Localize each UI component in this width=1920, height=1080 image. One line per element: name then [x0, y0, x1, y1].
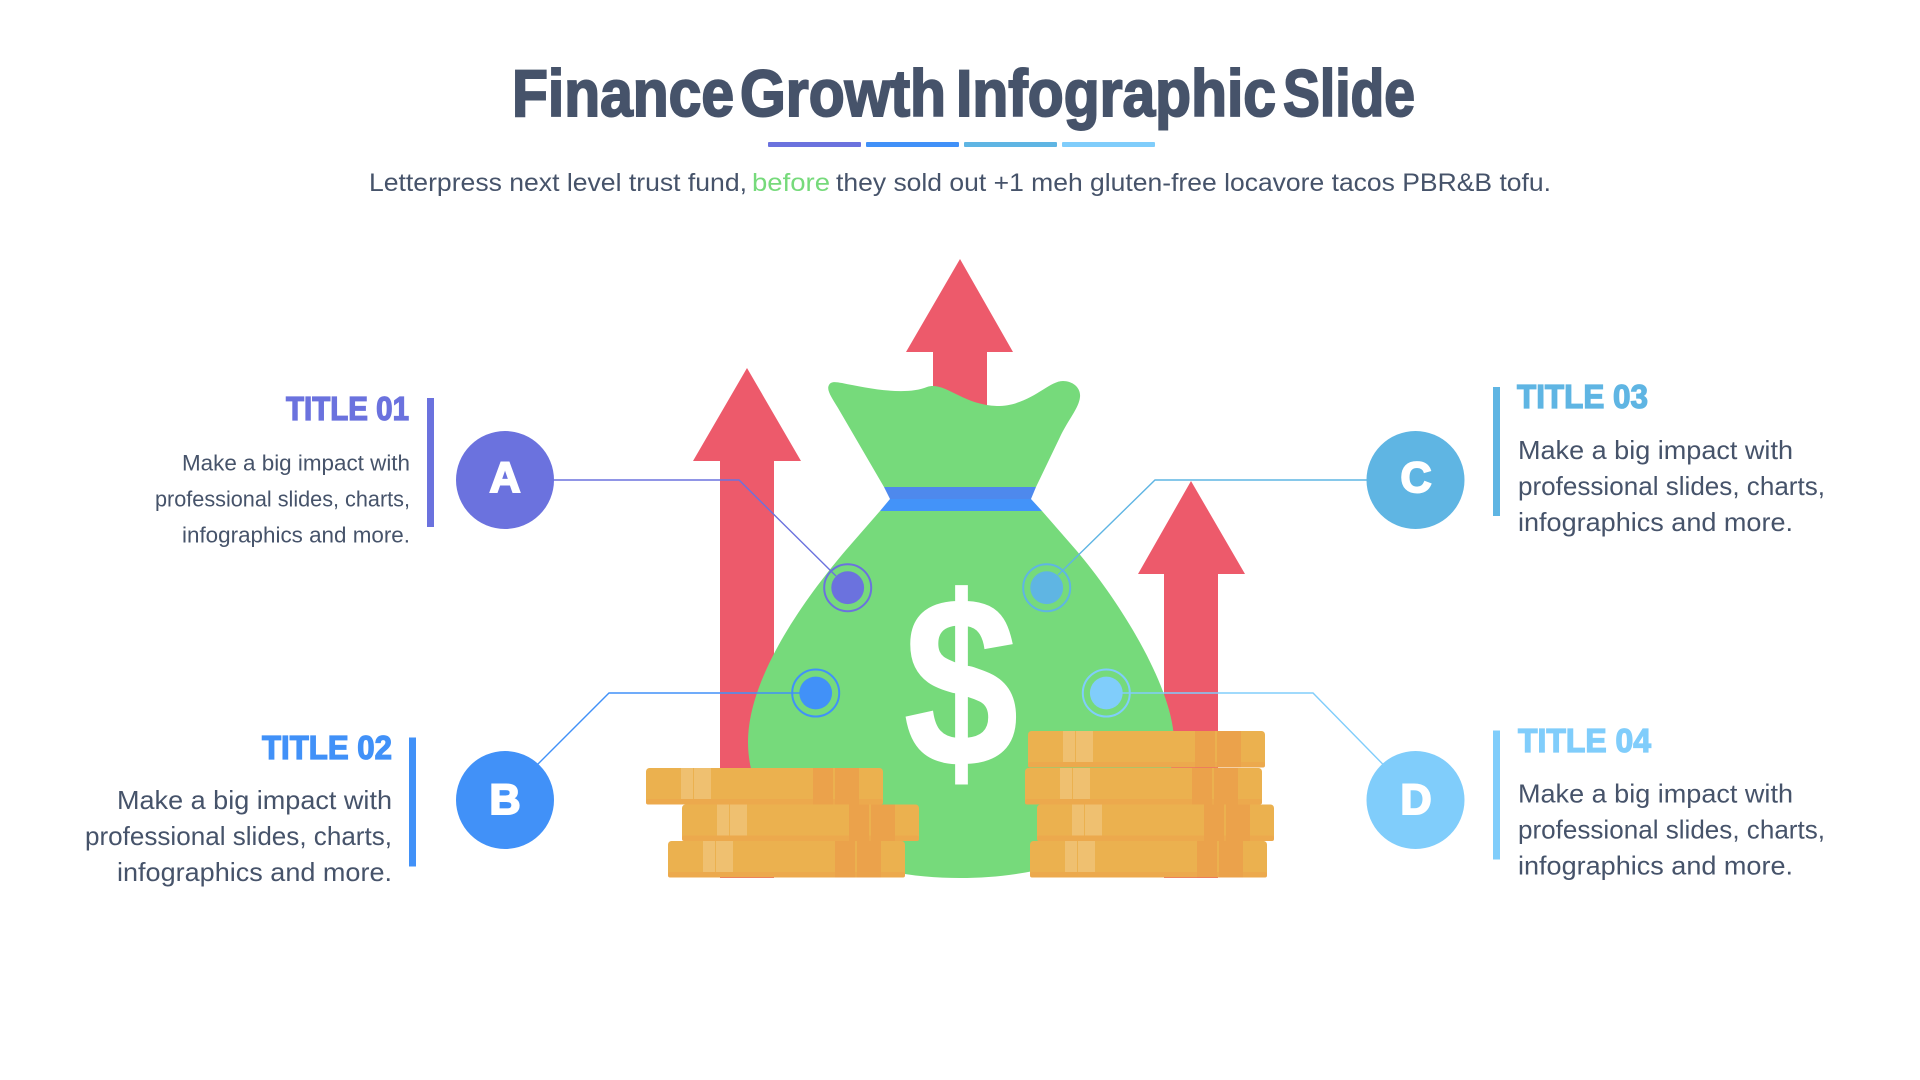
subtitle: they sold out +1 meh gluten-free locavore tacos PBR&B tofu. — [836, 169, 1551, 197]
heading: title 01: TITLE 01 — [286, 390, 409, 427]
badge D: D — [1400, 776, 1432, 824]
text: description A: Make a big impact with — [182, 450, 410, 476]
panel: item C — [1366, 378, 1825, 537]
title: Slide — [1283, 56, 1415, 130]
coin stack: right — [1025, 731, 1274, 878]
text: description B: Make a big impact with — [117, 785, 392, 815]
text: description C: professional slides, charts, — [1518, 471, 1825, 501]
text: description D — [1518, 778, 1825, 880]
badge B: B — [489, 776, 521, 824]
subtitle: Letterpress next level trust fund, — [369, 169, 747, 197]
subtitle: before — [752, 169, 830, 197]
badge A — [456, 431, 554, 529]
dollar sign: $ — [904, 547, 1018, 817]
marker: B — [792, 670, 839, 716]
text: description A: professional slides, charts, — [155, 486, 410, 512]
text: description C — [1518, 435, 1825, 537]
heading: title 02: TITLE 02 — [262, 729, 392, 766]
marker: D — [1083, 670, 1130, 716]
money bag — [748, 381, 1174, 878]
title — [512, 56, 1415, 130]
accent bar C — [1493, 387, 1500, 516]
text: description D: professional slides, charts, — [1518, 814, 1825, 844]
badge C: C — [1400, 454, 1432, 502]
arrow: right — [1138, 481, 1245, 878]
badge B — [456, 751, 554, 849]
text: description B: infographics and more. — [117, 857, 392, 887]
title: Finance — [512, 56, 734, 130]
title underline bars — [768, 142, 1155, 147]
accent bar D — [1493, 730, 1500, 860]
text: description A: infographics and more. — [182, 522, 410, 548]
heading: title 04: TITLE 04 — [1518, 722, 1652, 759]
panel: item D — [1366, 722, 1825, 880]
heading: title 03: TITLE 03 — [1517, 378, 1648, 415]
badge A: A — [489, 454, 521, 502]
bag tie band — [880, 487, 1042, 511]
connector: C — [1058, 480, 1415, 575]
accent bar A — [427, 398, 434, 527]
text: description B: professional slides, charts, — [85, 821, 392, 851]
connector: B — [505, 693, 800, 797]
marker: A — [824, 564, 871, 611]
arrow: left — [693, 368, 801, 878]
accent bar B — [409, 738, 416, 866]
arrow: center — [906, 259, 1013, 560]
panel: item B — [85, 729, 554, 887]
subtitle — [369, 169, 1551, 197]
text: description C: infographics and more. — [1518, 507, 1793, 537]
text: description D: Make a big impact with — [1518, 778, 1793, 808]
coin stack: left — [646, 768, 919, 878]
text: description A — [155, 450, 410, 548]
text: description B — [85, 785, 392, 887]
title: Infographic — [956, 56, 1276, 130]
title: Growth — [740, 56, 946, 130]
panel: item A — [155, 390, 554, 548]
marker: C — [1023, 564, 1070, 611]
connector: A — [505, 480, 836, 576]
badge C — [1366, 431, 1464, 529]
text: description D: infographics and more. — [1518, 850, 1793, 880]
text: description C: Make a big impact with — [1518, 435, 1793, 465]
badge D — [1366, 751, 1464, 849]
connector: D — [1122, 693, 1415, 797]
